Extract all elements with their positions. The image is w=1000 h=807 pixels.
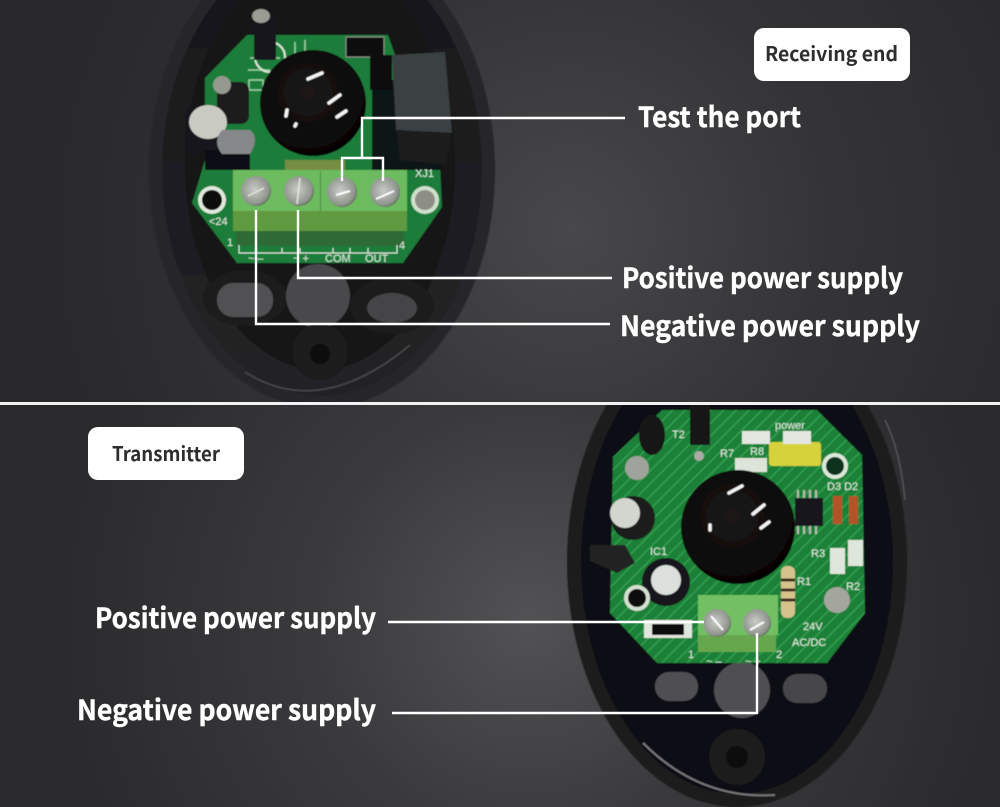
photo: transmitter module in oval housing xyxy=(566,405,908,807)
yellow component xyxy=(769,442,821,466)
connector: transmitter negative supply xyxy=(392,633,757,713)
board markings: OUT xyxy=(365,253,388,265)
board markings: XJ1 xyxy=(415,168,434,180)
board markings: IC1 xyxy=(650,546,667,558)
board markings: ~ + xyxy=(745,656,761,668)
panel: receiving end xyxy=(162,0,852,402)
divider xyxy=(0,402,1000,405)
terminal block xyxy=(698,595,778,652)
panel: transmitter xyxy=(198,405,907,807)
diodes and resistors xyxy=(624,431,863,638)
board markings: T2 xyxy=(672,429,685,441)
photo: receiver module in oval housing xyxy=(149,0,495,408)
board pads xyxy=(248,40,305,90)
chip xyxy=(795,490,823,534)
jumper xyxy=(346,37,384,57)
board markings: 1 xyxy=(688,649,694,661)
board markings: power xyxy=(775,420,805,432)
connector: receiver positive supply xyxy=(298,210,612,278)
badge: receiving end: Receiving end xyxy=(765,38,898,67)
board markings: 1 xyxy=(227,237,233,249)
board markings xyxy=(209,168,434,265)
capacitors xyxy=(185,9,285,170)
board markings: ~ – xyxy=(706,656,722,668)
badge: receiving end xyxy=(754,28,910,81)
board markings xyxy=(650,420,860,668)
board markings: ~ + xyxy=(293,253,309,265)
label: transmitter positive power supply: Positive power supply xyxy=(95,597,376,637)
transistor and leads xyxy=(590,405,710,573)
circuit board xyxy=(610,410,865,663)
label: receiver positive power supply: Positive power supply xyxy=(622,257,903,297)
badge: transmitter xyxy=(88,427,244,480)
mounting holes xyxy=(216,264,418,380)
terminal block xyxy=(233,170,407,246)
board markings: 2 xyxy=(776,649,782,661)
board markings: R2 xyxy=(846,581,860,593)
connector: receiver negative supply xyxy=(256,210,610,324)
connector: test the port xyxy=(342,118,625,181)
board markings: 24V xyxy=(803,621,823,633)
board markings: R1 xyxy=(797,576,811,588)
board markings: AC/DC xyxy=(792,637,826,649)
board markings: 4 xyxy=(399,240,405,252)
relay xyxy=(372,52,452,170)
capacitors xyxy=(610,496,690,606)
board markings: D3 D2 xyxy=(827,481,858,493)
dome lens xyxy=(260,50,366,156)
circuit board xyxy=(192,35,442,263)
badge: transmitter: Transmitter xyxy=(112,438,220,467)
dome lens xyxy=(681,470,795,584)
label: test the port: Test the port xyxy=(638,96,801,136)
board markings: ~ – xyxy=(248,253,264,265)
mounting holes xyxy=(655,662,827,785)
board markings: COM xyxy=(325,253,351,265)
board markings: R8 xyxy=(750,446,764,458)
board markings: <24 xyxy=(209,216,228,228)
connector: transmitter positive supply xyxy=(388,621,704,623)
label: transmitter negative power supply: Negative power supply xyxy=(77,689,376,729)
board markings: R3 xyxy=(811,548,825,560)
label: receiver negative power supply: Negative power supply xyxy=(620,305,920,345)
board markings: R7 xyxy=(720,448,734,460)
